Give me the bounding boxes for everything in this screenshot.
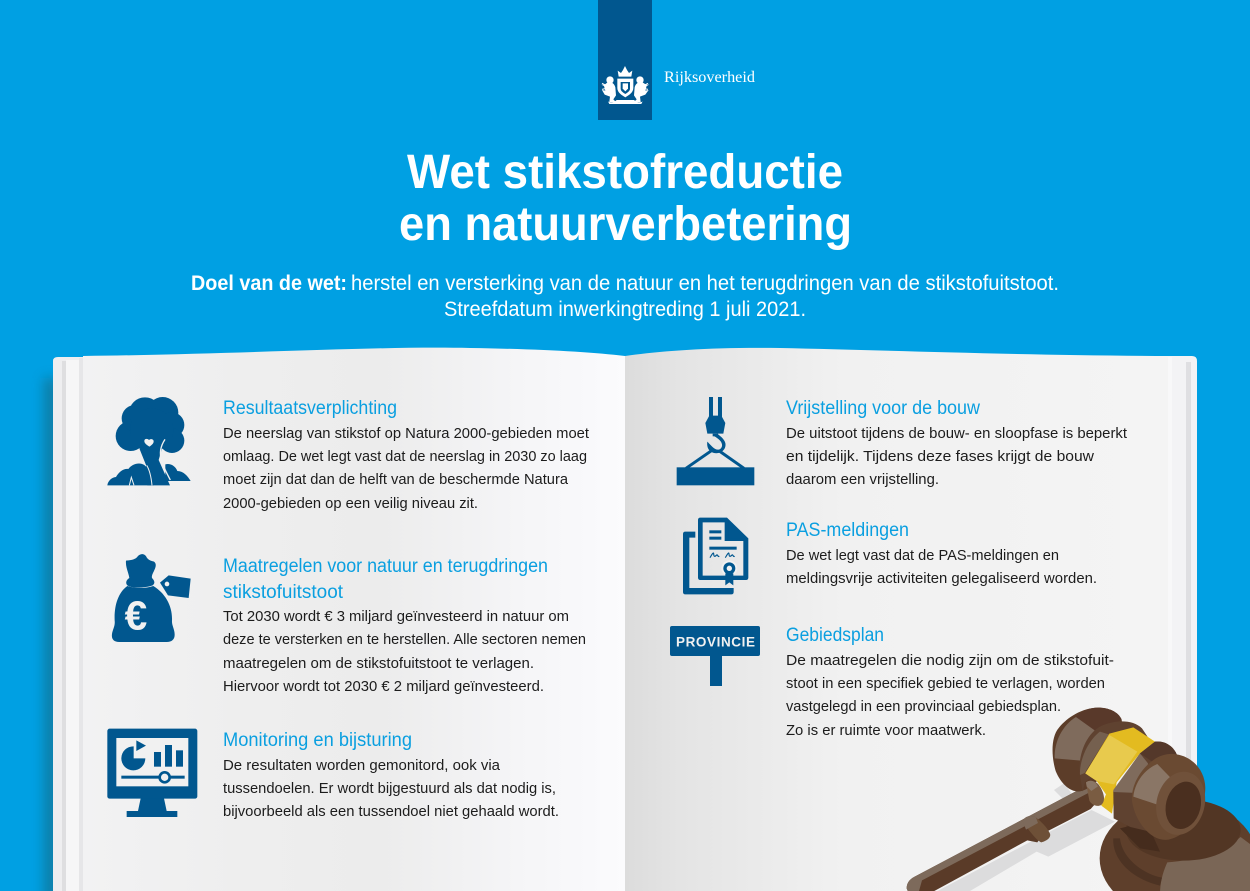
right page: [625, 348, 1168, 891]
block: PAS-meldingen: [683, 518, 1097, 594]
title: [399, 146, 852, 251]
icon: money bag: €: [125, 592, 147, 638]
heading: Maatregelen voor natuur en terugdringen: [223, 556, 548, 577]
logo: Rijksoverheid: [598, 0, 755, 120]
right cap: [1132, 754, 1205, 840]
block: Resultaatsverplichting: [107, 397, 590, 512]
body text: tussendoelen. Er wordt bijgestuurd als dat nodig is,: [223, 780, 556, 797]
body text: 2000-gebieden op een veilig niveau zit.: [223, 495, 478, 512]
heading: Monitoring en bijsturing: [223, 730, 412, 751]
block: Monitoring: [107, 729, 559, 820]
sound block: [1100, 799, 1250, 891]
body text: stoot in een specifiek gebied te verlagen, worden: [786, 675, 1105, 692]
body text: Tot 2030 wordt € 3 miljard geïnvesteerd in natuur om: [223, 608, 569, 625]
shadow: [930, 783, 1115, 891]
icon: provincie sign: PROVINCIE: [676, 634, 755, 650]
illustration: gavel: [907, 708, 1250, 891]
subtitle: [191, 272, 1059, 321]
title: Wet stikstofreductie: [407, 146, 843, 199]
body text: maatregelen om de stikstofuitstoot te verlagen.: [223, 655, 534, 672]
icon: monitor with charts: [107, 729, 197, 817]
right collar: [1113, 741, 1177, 835]
body text: vastgelegd in een provinciaal gebiedsplan.: [786, 698, 1061, 715]
heading: stikstofuitstoot: [223, 582, 344, 603]
body text: [223, 608, 586, 695]
heading: Vrijstelling voor de bouw: [786, 398, 980, 419]
yellow band: [1085, 727, 1155, 814]
left cap: [1053, 708, 1122, 791]
subtitle: Streefdatum inwerkingtreding 1 juli 2021.: [444, 298, 806, 321]
book: [44, 348, 1197, 891]
icon: provincie sign: [670, 626, 760, 686]
body text: moet zijn dat dan de helft van de beschermde Natura: [223, 471, 569, 488]
body text: deze te versterken en te herstellen. Alle sectoren nemen: [223, 631, 586, 648]
body text: omlaag. De wet legt vast dat de neerslag in 2030 zo laag: [223, 448, 587, 465]
handle pin: [1086, 781, 1104, 806]
handle: [907, 786, 1097, 891]
subtitle: herstel en versterking van de natuur en het terugdringen van de stikstofuitstoot.: [351, 272, 1059, 295]
body text: [223, 425, 590, 512]
body text: [786, 547, 1097, 587]
block: Maatregelen: [112, 554, 586, 695]
block: Gebiedsplan: [670, 625, 1114, 739]
wordmark: Rijksoverheid: [664, 69, 755, 86]
body text: De maatregelen die nodig zijn om de stikstofuit-: [786, 652, 1114, 669]
body text: De wet legt vast dat de PAS-meldingen en: [786, 547, 1059, 564]
body text: meldingsvrije activiteiten gelegaliseerd worden.: [786, 570, 1097, 587]
body text: [786, 652, 1114, 739]
icon: documents with seal: [683, 518, 748, 594]
block: Vrijstelling: [677, 397, 1128, 488]
body text: daarom een vrijstelling.: [786, 471, 939, 488]
body text: De neerslag van stikstof op Natura 2000-gebieden moet: [223, 425, 590, 442]
body text: Zo is er ruimte voor maatwerk.: [786, 722, 986, 739]
icon: coat of arms: [601, 66, 649, 104]
icon: tree: [107, 397, 191, 485]
body text: [786, 425, 1128, 488]
icon: money bag: [112, 554, 191, 642]
subtitle: Doel van de wet:: [191, 272, 347, 295]
heading: Resultaatsverplichting: [223, 398, 397, 419]
heading: PAS-meldingen: [786, 520, 909, 541]
body text: [223, 757, 559, 820]
heading: [223, 556, 548, 603]
body text: Hiervoor wordt tot 2030 € 2 miljard geïnvesteerd.: [223, 678, 544, 695]
body text: bijvoorbeeld als een tussendoel niet gehaald wordt.: [223, 803, 559, 820]
gavel head: [1053, 708, 1212, 840]
body text: en tijdelijk. Tijdens deze fases krijgt de bouw: [786, 448, 1094, 465]
left page: [83, 348, 625, 891]
body text: De uitstoot tijdens de bouw- en sloopfase is beperkt: [786, 425, 1128, 442]
title: en natuurverbetering: [399, 198, 852, 251]
left collar: [1080, 721, 1149, 792]
icon: crane hook: [677, 397, 754, 485]
body text: De resultaten worden gemonitord, ook via: [223, 757, 501, 774]
heading: Gebiedsplan: [786, 625, 884, 646]
